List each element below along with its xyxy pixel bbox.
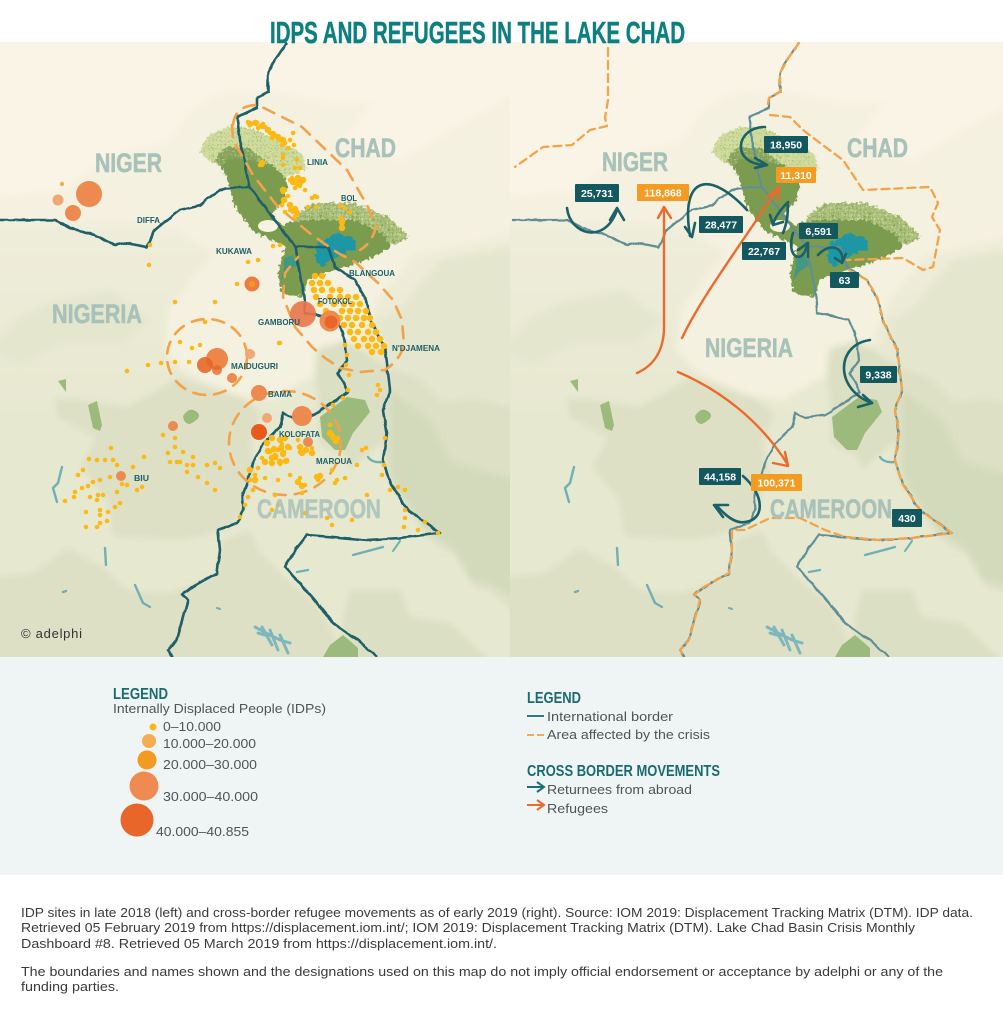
value labels: 28,477 <box>705 220 737 232</box>
legend: IDP circle sizes: 0–10.000 <box>163 719 221 734</box>
legend: borders and movements: Returnees from abroad <box>547 782 692 797</box>
city labels: BIU <box>134 473 149 483</box>
area affected by the crisis: dashed lines <box>515 43 952 657</box>
value labels: 25,731 <box>581 188 613 200</box>
title: IDPS AND REFUGEES IN THE LAKE CHAD <box>270 15 685 50</box>
orange refugee arrows <box>637 187 788 466</box>
copyright: © adelphi <box>21 626 82 641</box>
country labels <box>602 133 908 524</box>
country labels: CAMEROON <box>770 494 892 524</box>
legend: IDP circle sizes: 20.000–30.000 <box>163 757 257 772</box>
legend: IDP circle sizes: 10.000–20.000 <box>163 736 256 751</box>
value labels: 44,158 <box>704 472 736 484</box>
city labels: FOTOKOL <box>318 296 352 306</box>
value labels: 11,310 <box>780 170 812 182</box>
area affected by the crisis: dashed outlines <box>167 105 404 495</box>
country labels: CHAD <box>335 133 396 163</box>
legend: borders and movements: CROSS BORDER MOVEMENTS <box>527 763 720 780</box>
source note: Dashboard #8. Retrieved 05 March 2019 from https://displacement.iom.int/. <box>21 936 497 951</box>
source note: IDP sites in late 2018 (left) and cross-border refugee movements as of early 2019 (right). Source: IOM 2019: Displacement Tracking Matrix (DTM). IDP data. <box>21 905 973 920</box>
value labels: 9,338 <box>865 370 892 382</box>
legend: borders and movements: Area affected by the crisis <box>547 727 711 742</box>
legend: IDP circle sizes: 40.000–40.855 <box>156 824 249 839</box>
IDP sites: small yellow dots <box>65 122 438 533</box>
city labels: MAROUA <box>316 456 352 466</box>
legend: borders and movements: LEGEND <box>527 690 581 707</box>
source note <box>21 905 973 994</box>
legend: borders and movements <box>527 690 720 816</box>
city labels: KOLOFATA <box>279 429 320 439</box>
panel: left map of IDP sites <box>0 42 520 670</box>
country labels: NIGER <box>95 148 162 178</box>
country labels: NIGER <box>602 147 668 177</box>
legend: IDP circle sizes: LEGEND <box>113 686 168 703</box>
value labels: 118,868 <box>644 188 682 200</box>
city labels: MAIDUGURI <box>231 361 278 371</box>
source note: The boundaries and names shown and the designations used on this map do not imply official endorsement or acceptance by adelphi or any of the <box>21 964 943 979</box>
country labels: CHAD <box>847 133 908 163</box>
city labels: GAMBORU <box>258 317 300 327</box>
city labels <box>134 157 440 483</box>
city labels: BLANGOUA <box>349 268 395 278</box>
legend: borders and movements: Refugees <box>547 801 609 816</box>
city labels: N'DJAMENA <box>392 343 440 353</box>
IDP sites: large orange circles <box>52 181 340 481</box>
value labels: 63 <box>839 275 850 287</box>
legend panel background <box>0 657 1003 875</box>
country labels <box>52 133 396 524</box>
city labels: BAMA <box>268 389 292 399</box>
legend: IDP circle sizes: Internally Displaced People (IDPs) <box>113 701 326 716</box>
legend: borders and movements: International border <box>547 709 674 724</box>
international borders <box>0 43 440 657</box>
country labels: NIGERIA <box>52 299 142 329</box>
legend: IDP circle sizes <box>113 686 326 839</box>
country labels: NIGERIA <box>705 333 793 363</box>
city labels: BOL <box>341 193 357 203</box>
IDP sites: dense yellow clusters <box>250 123 384 486</box>
teal returnee arrows <box>567 127 872 522</box>
value labels <box>575 136 922 527</box>
city labels: LINIA <box>307 157 328 167</box>
city labels: KUKAWA <box>216 246 252 256</box>
source note: Retrieved 05 February 2019 from https://displacement.iom.int/; IOM 2019: Displacement Tracking Matrix (DTM). Lake Chad Basin Crisis Monthly <box>21 920 916 935</box>
value labels: 18,950 <box>770 140 802 152</box>
city labels: DIFFA <box>137 215 160 225</box>
value labels: 430 <box>898 513 916 525</box>
international borders <box>512 43 952 657</box>
value labels: 100,371 <box>758 478 796 490</box>
legend: IDP circle sizes: 30.000–40.000 <box>163 789 258 804</box>
panel: right map of cross-border movements <box>503 42 1003 670</box>
value labels: 6,591 <box>805 226 832 238</box>
country labels: CAMEROON <box>257 494 381 524</box>
source note: funding parties. <box>21 979 119 994</box>
value labels: 22,767 <box>748 246 780 258</box>
